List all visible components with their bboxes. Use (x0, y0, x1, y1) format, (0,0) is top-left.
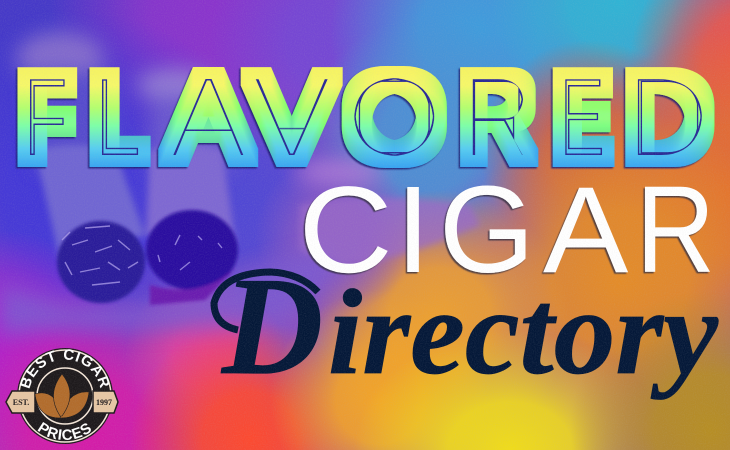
heading: Directory: irectory (328, 265, 719, 400)
text: Prices: PRICES (38, 422, 91, 440)
heading: FLAVORED: A (167, 50, 250, 183)
heading: CIGAR: I (396, 162, 430, 299)
heading: FLAVORED (21, 50, 711, 184)
heading: FLAVORED: D (624, 52, 711, 184)
heading: CIGAR: C (298, 160, 393, 298)
ribbon: Est. 1997 (6, 391, 118, 413)
heading: Directory (214, 249, 719, 404)
heading: FLAVORED: L (93, 51, 144, 183)
heading: FLAVORED: V (249, 51, 334, 184)
heading: FLAVORED: F (21, 50, 71, 184)
flourish on D (214, 272, 318, 330)
logo badge: Best Cigar Prices (5, 348, 119, 444)
heading: FLAVORED: E (556, 52, 609, 184)
heading: FLAVORED: R (461, 51, 534, 184)
leaf foreground wash (0, 250, 340, 335)
heading: CIGAR: G (439, 162, 535, 299)
icon: tobacco leaves (35, 374, 89, 418)
ribbon: Est. 1997: EST. (13, 398, 29, 407)
photo: two cigars on leaf (0, 32, 480, 335)
cigar left end (57, 221, 145, 303)
ribbon: Est. 1997: 1997 (96, 398, 112, 407)
heading: FLAVORED: O (345, 51, 444, 184)
heading: CIGAR: R (636, 161, 715, 298)
heading: Directory: D (220, 249, 323, 404)
cigar right end (146, 210, 238, 290)
text: Best Cigar: BEST CIGAR (20, 349, 110, 388)
heading: CIGAR: A (543, 160, 629, 298)
heading: CIGAR (298, 160, 715, 299)
